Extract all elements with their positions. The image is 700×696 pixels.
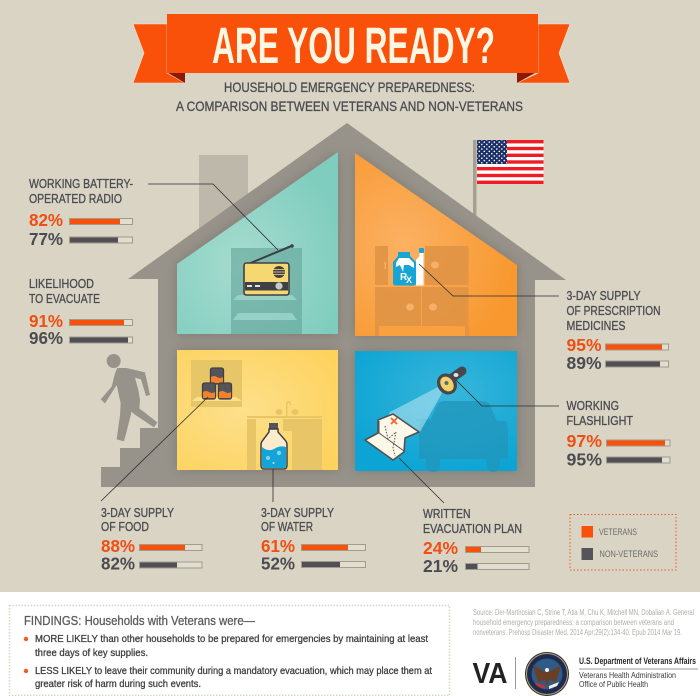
icon: water bottle	[261, 423, 287, 469]
footer panel	[0, 592, 700, 696]
legend: NON-VETERANS	[600, 549, 658, 559]
finding: less likely: greater risk of harm during such events.	[35, 678, 201, 690]
stat: written evacuation plan: WRITTEN	[423, 507, 470, 521]
stat: food: 88%	[101, 536, 135, 556]
panel: flashlight room	[355, 351, 517, 472]
stat: water: 61%	[261, 536, 295, 556]
stat: prescription medicines	[566, 289, 668, 373]
stat: likelihood to evacuate: TO EVACUATE	[29, 292, 100, 306]
stat: food	[101, 506, 202, 574]
leader lines	[101, 184, 559, 503]
stat: water: 52%	[261, 554, 295, 574]
title banner	[133, 14, 570, 83]
stat: prescription medicines: OF PRESCRIPTION	[566, 304, 660, 318]
car silhouette	[416, 401, 508, 472]
icon: flashlight	[433, 370, 462, 398]
icon: person walking down stairs	[101, 354, 157, 441]
stat: water: OF WATER	[261, 520, 313, 534]
finding: more likely	[24, 633, 428, 659]
panel: findings	[10, 606, 450, 696]
finding: more likely: MORE LIKELY than other households to be prepared for emergencies by maintaining at least	[35, 633, 428, 645]
stat: working battery-operated radio: WORKING BATTERY-	[29, 177, 133, 191]
stat: prescription medicines: 95%	[566, 335, 602, 355]
icon: flag	[473, 140, 544, 216]
stat: working flashlight	[566, 399, 670, 470]
finding: more likely: three days of key supplies.	[35, 647, 148, 659]
subtitle	[176, 79, 523, 114]
stat: prescription medicines: MEDICINES	[566, 319, 626, 333]
stat: likelihood to evacuate: LIKELIHOOD	[29, 277, 94, 291]
stat: working battery-operated radio: 77%	[29, 229, 63, 249]
stat: working flashlight: WORKING	[566, 399, 619, 413]
stat: food: 3-DAY SUPPLY	[101, 506, 175, 520]
stat: working battery-operated radio: OPERATED RADIO	[29, 192, 122, 206]
light beam	[388, 387, 442, 432]
department text: Veterans Health Administration	[579, 670, 676, 680]
stat: food: OF FOOD	[101, 520, 149, 534]
house	[101, 123, 566, 487]
stat: written evacuation plan: 24%	[423, 538, 458, 558]
room shadows	[177, 152, 517, 471]
icon: prescription bottles: X	[406, 275, 412, 285]
icon: prescription bottles: R	[400, 272, 408, 283]
panel: medicine room	[355, 153, 517, 336]
panel: pantry room	[177, 350, 338, 470]
stat: working battery-operated radio: 82%	[29, 210, 63, 230]
panel: radio room	[177, 152, 338, 334]
stat: prescription medicines: 3-DAY SUPPLY	[566, 289, 641, 303]
stat: written evacuation plan: EVACUATION PLAN	[423, 522, 522, 536]
stat: written evacuation plan	[423, 507, 529, 576]
stat: food: 82%	[101, 554, 135, 574]
stat: working flashlight: 97%	[566, 431, 602, 451]
stat: likelihood to evacuate	[29, 277, 132, 348]
finding: less likely: LESS LIKELY to leave their community during a mandatory evacuation, which may place them at	[35, 665, 432, 677]
VA logo: VA	[472, 658, 508, 690]
icon: canned food	[202, 368, 232, 399]
source citation	[473, 608, 694, 637]
stat: working flashlight: 95%	[566, 450, 602, 470]
legend: VETERANS	[599, 527, 637, 537]
icon: prescription bottles	[393, 248, 424, 286]
stat: likelihood to evacuate: 91%	[29, 311, 63, 331]
finding: less likely	[24, 665, 432, 690]
icon: evacuation map	[365, 414, 419, 460]
title: ARE YOU READY?	[212, 17, 495, 74]
department text	[579, 656, 698, 689]
findings heading: FINDINGS: Households with Veterans were—	[24, 613, 255, 628]
stat: water: 3-DAY SUPPLY	[261, 506, 335, 520]
stat: prescription medicines: 89%	[566, 353, 602, 373]
icon: VA seal	[525, 652, 569, 696]
stat: working battery-operated radio	[29, 177, 133, 249]
stat: likelihood to evacuate: 96%	[29, 328, 63, 348]
legend	[570, 514, 676, 570]
stat: water	[261, 506, 366, 574]
chimney	[199, 155, 248, 240]
department text: Office of Public Health	[579, 679, 648, 689]
stat: written evacuation plan: 21%	[423, 556, 458, 576]
stat: working flashlight: FLASHLIGHT	[566, 414, 633, 428]
subtitle: A COMPARISON BETWEEN VETERANS AND NON-VETERANS	[176, 98, 523, 114]
subtitle: HOUSEHOLD EMERGENCY PREPAREDNESS:	[224, 79, 475, 95]
icon: radio	[244, 244, 294, 295]
